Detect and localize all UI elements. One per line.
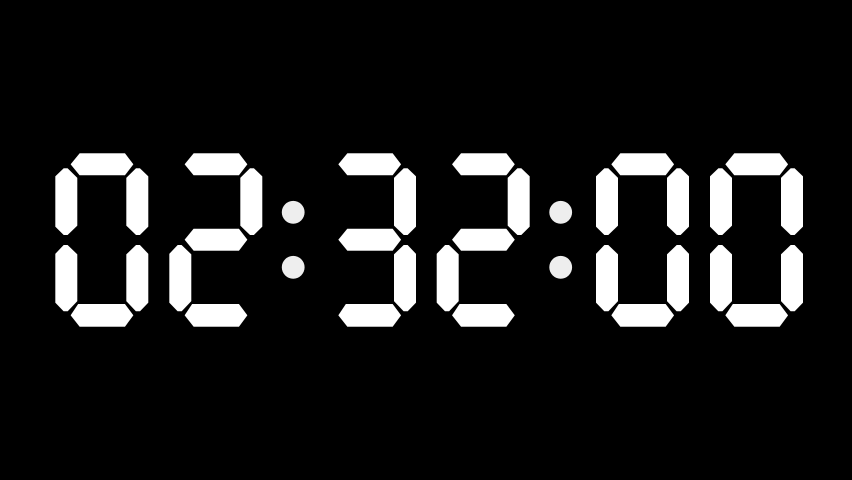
digit: hours units 2	[170, 154, 262, 326]
colon: minutes and seconds separator	[549, 201, 572, 279]
digit: seconds units 0	[710, 154, 803, 326]
digit: hours tens 0	[56, 154, 148, 326]
colon: hours and minutes separator	[282, 201, 305, 279]
digit: minutes units 2	[437, 154, 529, 326]
digit: minutes tens 3	[339, 154, 416, 326]
digit: seconds tens 0	[596, 154, 689, 326]
